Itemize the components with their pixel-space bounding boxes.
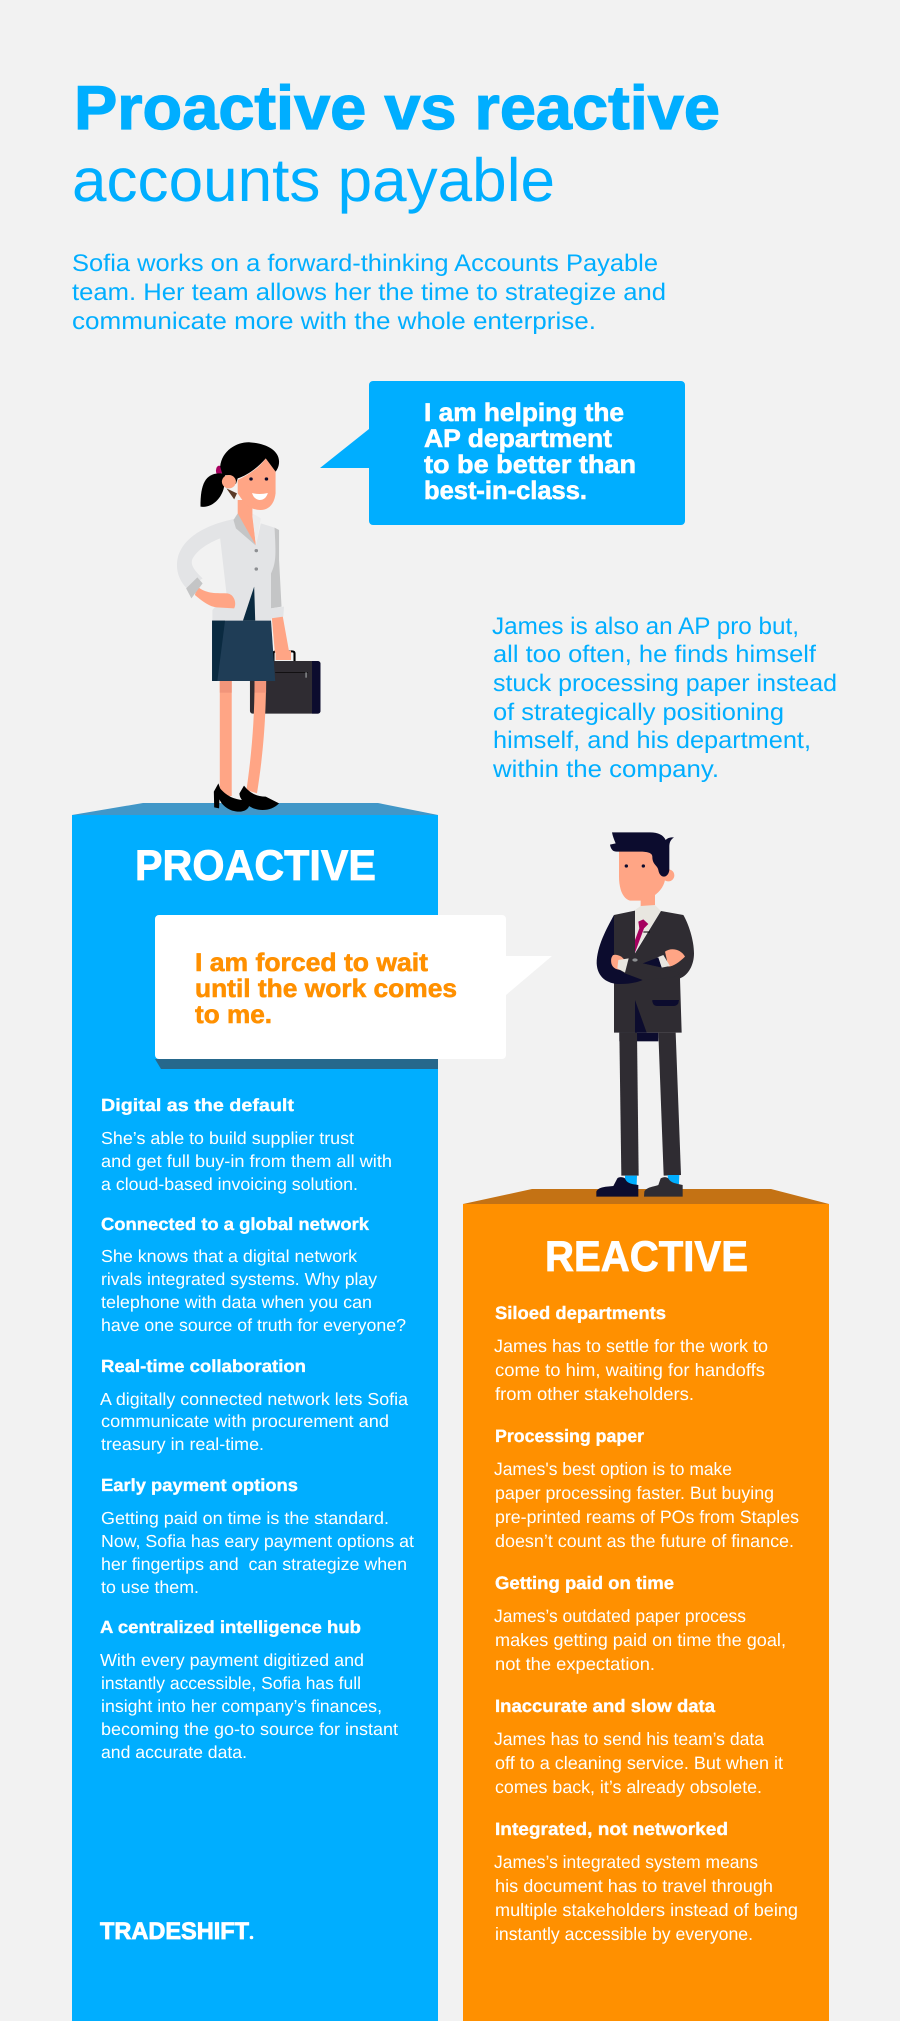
proactive item: a centralized intelligence hub: becoming the go-to source for instant: [101, 1719, 398, 1739]
reactive item: siloed departments: from other stakeholders.: [495, 1384, 694, 1404]
proactive item: early payment options: to use them.: [101, 1577, 199, 1597]
speech bubble: Sofia: best-in-class.: [424, 477, 587, 505]
proactive item: a centralized intelligence hub: With every payment digitized and: [100, 1650, 364, 1670]
reactive item: integrated, not networked: [494, 1819, 798, 1944]
reactive item: processing paper: [494, 1426, 799, 1551]
reactive item: integrated, not networked: multiple stakeholders instead of being: [495, 1900, 798, 1920]
briefcase: [250, 651, 320, 714]
intro text: James: stuck processing paper instead: [493, 670, 837, 697]
reactive item: processing paper: Processing paper: [495, 1426, 644, 1446]
proactive item: real-time collaboration: [100, 1356, 408, 1454]
reactive item: integrated, not networked: James’s integrated system means: [494, 1852, 758, 1872]
ponytail: [200, 466, 225, 507]
pocket and vent: [635, 1000, 679, 1033]
shoes: [214, 783, 279, 812]
proactive item: real-time collaboration: A digitally connected network lets Sofia: [100, 1389, 408, 1409]
neck: [238, 500, 256, 545]
left hand and cuff: [195, 587, 235, 608]
reactive item: siloed departments: come to him, waiting for handoffs: [495, 1360, 765, 1380]
proactive item: real-time collaboration: communicate with procurement and: [101, 1411, 389, 1431]
reactive item: processing paper: James's best option is to make: [494, 1459, 732, 1479]
proactive item: digital as the default: [101, 1095, 392, 1194]
panel: reactive: [463, 1189, 829, 2021]
reactive item: inaccurate and slow data: Inaccurate and slow data: [495, 1696, 716, 1716]
intro text: Sofia: communicate more with the whole enterprise.: [72, 308, 596, 335]
reactive item: processing paper: doesn’t count as the future of finance.: [495, 1531, 794, 1551]
heading: proactive: PROACTIVE: [135, 842, 376, 890]
speech bubble: Sofia: to be better than: [424, 451, 636, 479]
intro text: James: James is also an AP pro but,: [492, 613, 799, 640]
shirt collar: [635, 905, 661, 952]
face: [619, 850, 665, 901]
proactive item: connected to a global network: telephone with data when you can: [101, 1292, 372, 1312]
reactive item: siloed departments: Siloed departments: [495, 1303, 666, 1323]
legs: [619, 1033, 681, 1185]
reactive item: getting paid on time: [494, 1573, 786, 1674]
ear and neck: [641, 869, 674, 915]
title: accounts payable: [72, 146, 555, 214]
intro text: Sofia: [72, 250, 666, 335]
reactive item: getting paid on time: James’s outdated paper process: [494, 1606, 746, 1626]
reactive item: integrated, not networked: his document has to travel through: [495, 1876, 773, 1896]
speech bubble: Sofia: [320, 381, 685, 525]
speech bubble: James: [155, 915, 552, 1069]
proactive item: digital as the default: a cloud-based invoicing solution.: [101, 1174, 358, 1194]
title: [72, 74, 720, 214]
tie: [635, 919, 648, 953]
speech bubble: Sofia: AP department: [424, 425, 613, 453]
proactive item: a centralized intelligence hub: insight into her company’s finances,: [101, 1696, 382, 1716]
reactive item: integrated, not networked: instantly accessible by everyone.: [495, 1924, 753, 1944]
reactive item: getting paid on time: makes getting paid on time the goal,: [495, 1630, 786, 1650]
heading: reactive: REACTIVE: [545, 1233, 748, 1281]
reactive item: getting paid on time: Getting paid on time: [495, 1573, 674, 1593]
proactive item: digital as the default: Digital as the default: [101, 1095, 294, 1115]
jacket: [614, 911, 694, 1033]
shoes: [596, 1177, 683, 1197]
reactive item: inaccurate and slow data: comes back, it’s already obsolete.: [495, 1777, 762, 1797]
intro text: Sofia: team. Her team allows her the time to strategize and: [72, 279, 666, 306]
illustration: James: [596, 832, 694, 1197]
proactive item: real-time collaboration: Real-time collaboration: [101, 1356, 306, 1376]
reactive item: siloed departments: James has to settle for the work to: [494, 1336, 768, 1356]
intro text: James: within the company.: [492, 756, 719, 783]
proactive item: connected to a global network: [101, 1214, 406, 1335]
speech bubble: James: to me.: [195, 1001, 272, 1029]
reactive item: processing paper: paper processing faster. But buying: [495, 1483, 774, 1503]
reactive item: getting paid on time: not the expectation.: [495, 1654, 655, 1674]
reactive item: inaccurate and slow data: off to a cleaning service. But when it: [495, 1753, 783, 1773]
proactive item: early payment options: Now, Sofia has eary payment options at: [101, 1531, 414, 1551]
proactive item: connected to a global network: Connected to a global network: [101, 1214, 369, 1234]
proactive item: digital as the default: and get full buy-in from them all with: [101, 1151, 392, 1171]
proactive item: a centralized intelligence hub: [100, 1617, 398, 1762]
right arm: [272, 615, 291, 660]
proactive item: connected to a global network: rivals integrated systems. Why play: [101, 1269, 377, 1289]
panel: proactive: [72, 803, 438, 2021]
proactive item: connected to a global network: She knows that a digital network: [101, 1246, 357, 1266]
proactive item: connected to a global network: have one source of truth for everyone?: [101, 1315, 406, 1335]
legs: [220, 681, 266, 796]
speech bubble: James: I am forced to wait: [195, 949, 429, 977]
intro text: James: himself, and his department,: [493, 727, 811, 754]
intro text: James: of strategically positioning: [493, 699, 784, 726]
reactive item: siloed departments: [494, 1303, 768, 1404]
proactive item: real-time collaboration: treasury in real-time.: [101, 1434, 264, 1454]
proactive item: digital as the default: She’s able to build supplier trust: [101, 1128, 354, 1148]
reactive item: integrated, not networked: Integrated, not networked: [495, 1819, 728, 1839]
blouse: [177, 519, 276, 621]
proactive item: a centralized intelligence hub: instantly accessible, Sofia has full: [101, 1673, 361, 1693]
proactive item: a centralized intelligence hub: A centralized intelligence hub: [100, 1617, 361, 1637]
proactive item: early payment options: Getting paid on time is the standard.: [101, 1508, 389, 1528]
proactive item: early payment options: Early payment options: [101, 1475, 298, 1495]
speech bubble: Sofia: I am helping the: [424, 399, 624, 427]
skirt: [212, 621, 275, 681]
title: Proactive vs reactive: [74, 74, 720, 143]
logo: Tradeshift: TRADESHIFT: [100, 1918, 249, 1945]
speech bubble: James: until the work comes: [195, 975, 457, 1003]
hair: [610, 832, 674, 877]
proactive item: early payment options: [101, 1475, 414, 1597]
reactive item: inaccurate and slow data: James has to send his team’s data: [494, 1729, 765, 1749]
proactive item: a centralized intelligence hub: and accurate data.: [101, 1742, 247, 1762]
reactive item: processing paper: pre-printed reams of POs from Staples: [495, 1507, 799, 1527]
intro text: Sofia: Sofia works on a forward-thinking Accounts Payable: [72, 250, 658, 277]
reactive item: inaccurate and slow data: [494, 1696, 783, 1797]
illustration: Sofia: [177, 442, 320, 812]
intro text: James: all too often, he finds himself: [493, 641, 816, 668]
head: [220, 442, 279, 510]
proactive item: early payment options: her fingertips and can strategize when: [101, 1554, 407, 1574]
intro text: James: [492, 613, 837, 783]
folded arms: [597, 915, 685, 984]
